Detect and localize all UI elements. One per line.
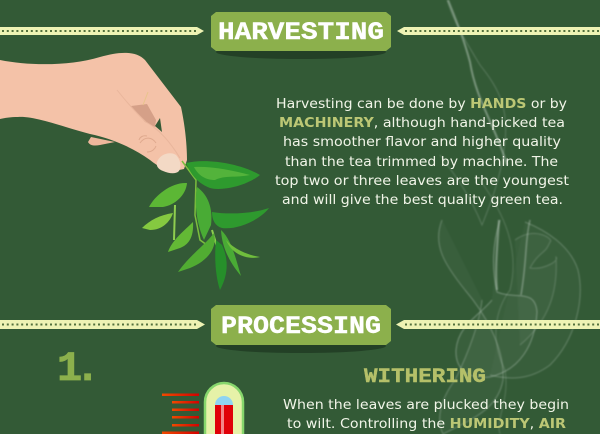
divider: harvesting left (0, 27, 204, 35)
step number: . (75, 345, 100, 393)
divider: processing left (0, 320, 205, 329)
smoke wisps (439, 0, 580, 434)
finger behind (88, 137, 115, 146)
divider: processing right (396, 320, 600, 329)
thumb creases (139, 136, 156, 152)
banner: processing (211, 305, 391, 353)
text block: harvesting description (275, 97, 569, 208)
text block: harvesting description: than the tea trimmed by machine. The (285, 155, 558, 170)
text block: harvesting description: top two or three leaves are the youngest (275, 174, 569, 189)
heading: harvesting: HARVESTING (218, 18, 384, 47)
banner: harvesting (211, 12, 391, 59)
text block: withering description: to wilt. Controlling the HUMIDITY , AIR (287, 417, 566, 432)
text block: harvesting description: Harvesting can be done by HANDS or by (276, 97, 567, 112)
hand (0, 53, 187, 173)
finger shadow (131, 104, 156, 127)
thumbnail (157, 153, 180, 173)
subheading: withering: WITHERING (364, 366, 486, 389)
icon: thermometer (162, 383, 243, 434)
heading: processing: PROCESSING (221, 312, 381, 341)
icon: tea leaves (142, 161, 269, 290)
text block: harvesting description: and will give the best quality green tea. (282, 193, 563, 208)
text block: harvesting description: MACHINERY , although hand-picked tea (279, 116, 565, 131)
temperature ticks (162, 394, 199, 434)
step number: 1 (57, 345, 82, 393)
gap between fingers (155, 118, 162, 132)
text block: withering description: When the leaves are plucked they begin (283, 398, 569, 413)
text block: harvesting description: has smoother flavor and higher quality (283, 135, 561, 150)
text block: withering description (283, 398, 569, 432)
divider: harvesting right (397, 27, 600, 35)
